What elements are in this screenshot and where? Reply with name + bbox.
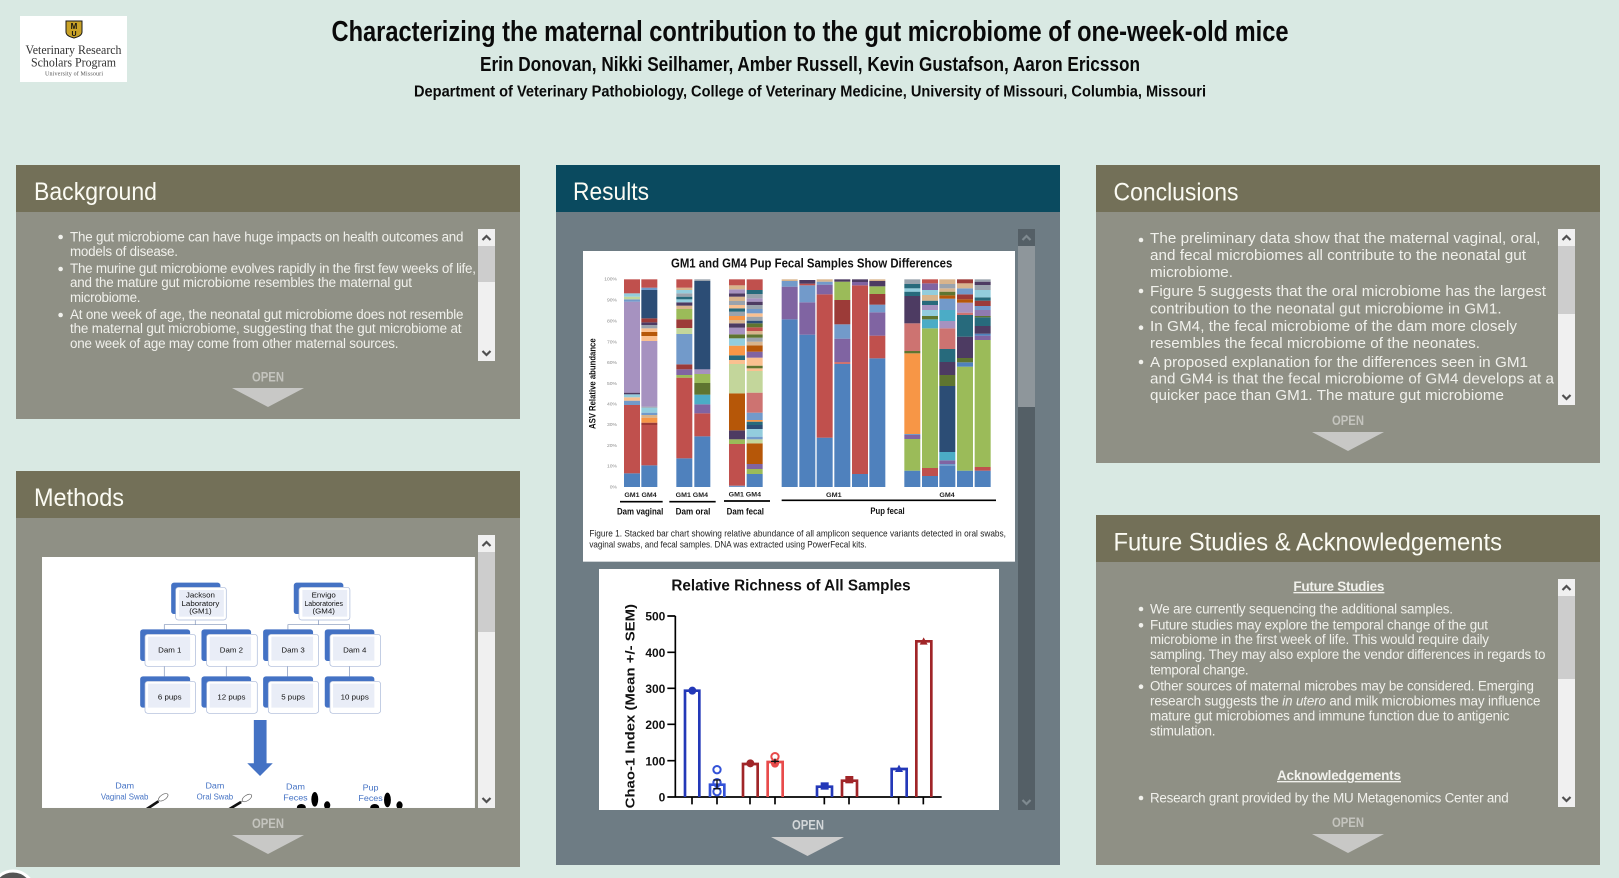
text block: background bullets: and the mature gut microbiome resembles the maternal gut [70, 275, 412, 290]
text block: future studies: stimulation. [1150, 723, 1216, 738]
y axis: 200 [645, 718, 666, 732]
x axis labels: Dam fecal [727, 507, 764, 517]
node: 5 pups [263, 676, 319, 713]
node: Jackson Laboratory: (GM1) [189, 607, 212, 616]
arrow: results open [771, 837, 844, 856]
node: Dam 4 [325, 629, 381, 666]
y axis labels: 0% [610, 485, 618, 491]
text block: future studies: sampling. They may also explore the vendor differences in regards to [1150, 647, 1546, 662]
node: Jackson Laboratory [171, 583, 226, 620]
text block: background bullets: the maternal gut microbiome, suggesting that the gut microbiome at [70, 321, 462, 336]
sample labels and icons: Dam [286, 782, 305, 792]
node: 5 pups: 5 pups [281, 692, 305, 701]
text block: conclusions bullets: Figure 5 suggests that the oral microbiome has the largest [1150, 283, 1547, 300]
node: 6 pups [140, 676, 196, 713]
open label: methods: OPEN [252, 816, 284, 831]
arrow: conclusions open [1312, 432, 1384, 451]
text block: background bullets: At one week of age, the neonatal gut microbiome does not resemble [70, 307, 464, 322]
node: Dam 4: Dam 4 [343, 646, 367, 655]
panel: conclusions [1096, 165, 1600, 463]
bar: dam fecal GM1 [729, 279, 745, 487]
node: Envigo Laboratories: Laboratories [304, 599, 343, 608]
y axis labels: 70% [607, 339, 618, 345]
y axis: 300 [645, 682, 666, 696]
x axis labels: Dam oral [676, 507, 710, 517]
affiliation: Department of Veterinary Pathobiology, College of Veterinary Medicine, University of Missouri, Columbia, Missouri [414, 84, 1206, 100]
text block: background bullets: models of disease. [70, 244, 178, 259]
y axis labels: 60% [607, 360, 618, 366]
open label: background: OPEN [252, 370, 284, 384]
figure caption [589, 528, 1006, 549]
heading: conclusions: Conclusions [1114, 178, 1238, 206]
x axis labels [617, 491, 996, 517]
logo: Veterinary Research Scholars Program: University of Missouri [45, 70, 103, 78]
x axis labels: GM1 GM4 [676, 492, 708, 499]
arrow: methods open [232, 835, 304, 854]
text block: future studies: Future Studies [1293, 579, 1384, 594]
node: 12 pups: 12 pups [217, 692, 246, 701]
text block: background bullets: The gut microbiome can have huge impacts on health outcomes and [70, 230, 464, 244]
node: Jackson Laboratory: Jackson [186, 591, 215, 600]
x axis labels: GM1 GM4 [729, 491, 761, 498]
figure caption: vaginal swabs, and fecal samples. DNA was extracted using PowerFecal kits. [589, 539, 867, 549]
bar: dam oral GM1 [676, 279, 692, 487]
node: 12 pups [201, 676, 257, 713]
text block: future studies: mature gut microbiomes and immune function due to antigenic [1150, 708, 1510, 723]
y axis: Chao-1 Index (Mean +/- SEM) [623, 604, 637, 808]
sample labels and icons: Feces [283, 792, 308, 802]
figure: richness bar chart [599, 569, 999, 810]
text block: future studies: temporal change. [1150, 662, 1249, 677]
text block: conclusions bullets: and GM4 is that the fecal microbiome of GM4 develops at a [1150, 370, 1555, 388]
sample labels and icons: Vaginal Swab [101, 791, 149, 801]
open label: conclusions: OPEN [1332, 413, 1364, 428]
heading: background: Background [34, 178, 157, 206]
scrollbar: results [1018, 229, 1035, 810]
text block: conclusions bullets: The preliminary data show that the maternal vaginal, oral, [1150, 230, 1540, 247]
node: Dam 2: Dam 2 [220, 646, 243, 655]
scrollbar: future studies [1558, 579, 1575, 807]
text block: future studies: Future studies may explore the temporal change of the gut [1150, 617, 1488, 632]
text block: conclusions bullets: contribution to the neonatal gut microbiome in GM1. [1150, 300, 1502, 317]
icon: MU shield [66, 21, 82, 38]
figure: stacked bar chart [583, 251, 1015, 562]
text block: background bullets: microbiome. [70, 290, 140, 305]
text block: conclusions bullets: quicker pace than GM1. The mature gut microbiome [1150, 387, 1504, 404]
bar: dam vaginal GM4 [641, 279, 657, 487]
heading: future studies and acknowledgements: Future Studies & Acknowledgements [1114, 528, 1502, 556]
arrow: future studies open [1312, 834, 1384, 853]
node: 10 pups: 10 pups [341, 692, 369, 701]
text block: future studies: We are currently sequencing the additional samples. [1150, 601, 1453, 616]
text block: acknowledgements: Acknowledgements [1277, 768, 1401, 783]
sample labels and icons: Oral Swab [197, 791, 233, 801]
badge: bottom-left circular control [0, 871, 34, 878]
text block: conclusions bullets [1139, 230, 1555, 404]
text block: conclusions bullets: A proposed explanation for the differences seen in GM1 [1150, 354, 1528, 371]
text block: acknowledgements: Research grant provided by the MU Metagenomics Center and [1150, 790, 1509, 805]
sample labels and icons: Dam [115, 781, 134, 791]
title: Characterizing the maternal contribution to the gut microbiome of one-week-old mice [332, 16, 1288, 48]
bar: dam vaginal GM1 [624, 279, 640, 487]
panel: future studies and acknowledgements [1096, 515, 1600, 865]
node: Envigo Laboratories: (GM4) [313, 607, 335, 616]
sample labels and icons: Feces [358, 793, 383, 803]
y axis labels: 30% [607, 422, 618, 428]
x axis labels: GM1 [826, 492, 842, 499]
x axis labels: Dam vaginal [617, 507, 663, 517]
logo: Veterinary Research Scholars Program: Veterinary Research [26, 42, 122, 57]
text block: future studies: Other sources of maternal microbes may be considered. Emerging [1150, 678, 1534, 693]
y axis: 500 [645, 610, 666, 624]
y axis labels: 90% [607, 298, 618, 304]
y axis: 100 [645, 754, 666, 768]
sample labels and icons: Pup [363, 782, 379, 792]
icon: MU shield: M [71, 22, 78, 31]
scrollbar: conclusions [1558, 229, 1575, 405]
bars: pup fecal GM4 [904, 279, 991, 487]
y axis labels: ASV Relative abundance [587, 338, 597, 429]
node: Envigo Laboratories [294, 583, 350, 620]
scrollbar: methods [478, 535, 495, 808]
node: Dam 2 [201, 629, 257, 666]
text block: acknowledgements [1139, 768, 1509, 805]
node: Jackson Laboratory: Laboratory [182, 599, 219, 608]
node: Dam 1: Dam 1 [158, 646, 181, 655]
node: Envigo Laboratories: Envigo [312, 591, 336, 600]
bar: dam fecal GM4 [747, 279, 763, 487]
heading: results: Results [573, 178, 649, 206]
figure: methods flowchart [42, 557, 475, 811]
y axis: 0 [659, 791, 666, 805]
x axis labels: GM1 GM4 [624, 492, 657, 499]
logo: Veterinary Research Scholars Program [20, 16, 127, 82]
text block: conclusions bullets: In GM4, the fecal microbiome of the dam more closely [1150, 318, 1517, 335]
node: Dam 1 [140, 629, 196, 666]
text block: background bullets: The murine gut microbiome evolves rapidly in the first few weeks of life, [70, 261, 476, 276]
text block: conclusions bullets: microbiome. [1150, 264, 1233, 281]
panel: results [556, 165, 1060, 865]
text block: future studies: research suggests the in utero and milk microbiomes may influence [1150, 693, 1540, 708]
icon: MU shield: U [71, 31, 77, 38]
panel: background [16, 165, 520, 419]
authors: Erin Donovan, Nikki Seilhamer, Amber Russell, Kevin Gustafson, Aaron Ericsson [480, 54, 1140, 76]
sample labels and icons [101, 782, 403, 808]
bar: dam oral GM4 [694, 279, 710, 487]
text block: future studies: microbiome in the first week of life. This would require daily [1150, 632, 1489, 647]
chart title: GM1 and GM4 Pup Fecal Samples Show Differences [671, 257, 952, 271]
panel: methods [16, 471, 520, 867]
text block: conclusions bullets: resembles the fecal microbiome of the neonates. [1150, 335, 1480, 352]
y axis labels: 20% [607, 443, 618, 449]
open label: future studies: OPEN [1332, 815, 1364, 830]
text block: conclusions bullets: and fecal microbiomes all contribute to the neonatal gut [1150, 247, 1527, 264]
node: 6 pups: 6 pups [158, 692, 182, 701]
y axis labels: 40% [607, 402, 618, 408]
y axis labels: 80% [607, 318, 618, 324]
y axis [623, 604, 942, 808]
node: 10 pups [325, 676, 381, 713]
bars [685, 637, 931, 797]
text block: future studies [1139, 579, 1546, 738]
text block: background bullets [58, 230, 476, 351]
x axis labels: GM4 [939, 492, 955, 499]
node: Dam 3: Dam 3 [281, 646, 305, 655]
sample labels and icons: Dam [205, 781, 224, 791]
chart title: Relative Richness of All Samples [671, 578, 911, 595]
x axis labels: Pup fecal [870, 506, 905, 516]
arrow: flow down [247, 720, 273, 776]
heading: methods: Methods [34, 484, 124, 512]
figure caption: Figure 1. Stacked bar chart showing relative abundance of all amplicon sequence variants detected in oral swabs, [589, 528, 1006, 538]
node: Dam 3 [263, 629, 319, 666]
y axis: 400 [645, 646, 666, 660]
bars: pup fecal GM1 [782, 279, 885, 487]
scrollbar: background [478, 229, 495, 361]
y axis labels: 10% [607, 464, 618, 470]
arrow: background open [232, 388, 304, 407]
y axis labels: 100% [604, 277, 618, 283]
text block: background bullets: one week of age may come from other maternal sources. [70, 336, 398, 351]
logo: Veterinary Research Scholars Program: Scholars Program [31, 54, 116, 70]
y axis labels: 50% [607, 381, 618, 387]
y axis labels [587, 277, 618, 491]
open label: results: OPEN [792, 818, 824, 832]
